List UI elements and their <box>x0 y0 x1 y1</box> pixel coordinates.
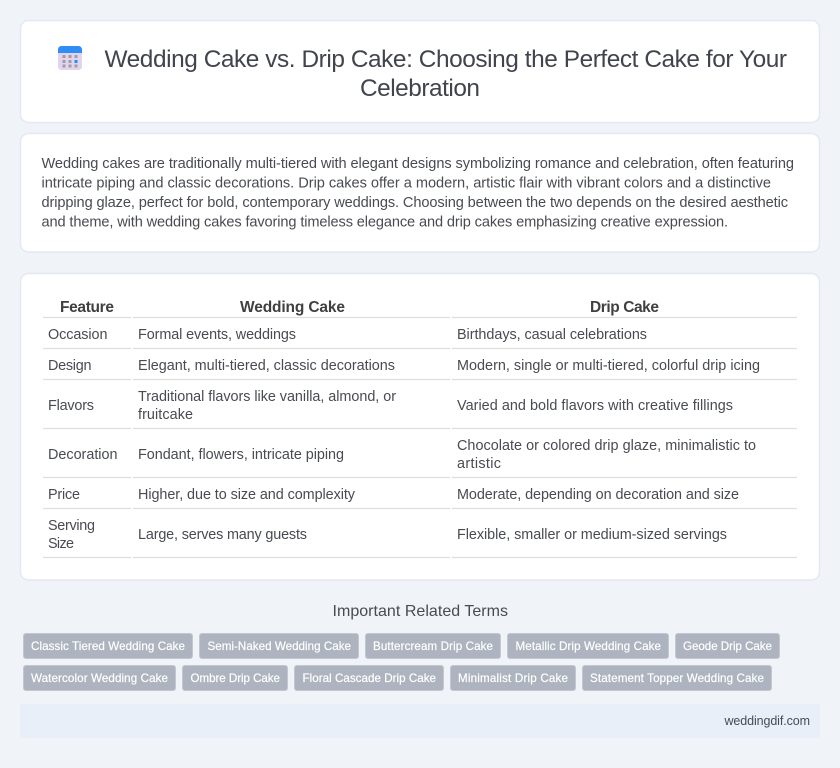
text block: introduction paragraph: and theme, with wedding cakes favoring timeless elegance and drip cakes emphasizing creative expression. <box>42 214 728 230</box>
table row: occasion: Formal events, weddings <box>138 327 296 343</box>
tag <box>24 634 192 658</box>
tag <box>200 634 358 658</box>
table row: design: Modern, single or multi-tiered, colorful drip icing <box>457 358 760 374</box>
text block: introduction paragraph: dripping glaze, perfect for bold, contemporary weddings. Choosing between the two depends on the desired aesthetic <box>42 195 788 211</box>
panel: introduction <box>20 134 820 252</box>
tag: Ombre Drip Cake <box>190 672 280 685</box>
title <box>104 46 787 102</box>
table row: decoration: artistic <box>457 456 501 472</box>
table row: price: Higher, due to size and complexity <box>138 487 356 503</box>
table row: flavors: Flavors <box>48 398 94 414</box>
tag: Classic Tiered Wedding Cake <box>31 640 185 653</box>
table row: occasion <box>48 327 647 343</box>
table row: serving size: Flexible, smaller or medium-sized servings <box>457 527 727 543</box>
table row: flavors: Traditional flavors like vanilla, almond, or <box>138 389 396 405</box>
footer bar: weddingdif.com <box>724 714 810 728</box>
table row: design: Elegant, multi-tiered, classic decorations <box>138 358 395 374</box>
footer bar <box>20 704 820 738</box>
text block: introduction paragraph: intricate piping and classic decorations. Drip cakes offer a modern, artistic flair with vibrant colors and a distinctive <box>42 176 771 192</box>
table row: flavors: fruitcake <box>138 407 193 423</box>
tag: Semi-Naked Wedding Cake <box>208 640 351 653</box>
tag: Geode Drip Cake <box>683 640 772 653</box>
table row: serving size <box>48 518 727 552</box>
text block: introduction paragraph: Wedding cakes are traditionally multi-tiered with elegant designs symbolizing romance and celebration, often featuring <box>42 156 794 172</box>
tag <box>24 666 176 690</box>
table row: price: Price <box>48 487 80 503</box>
table header row: Drip Cake <box>590 299 659 316</box>
tag <box>508 634 668 658</box>
tag <box>582 666 772 690</box>
tag <box>182 666 288 690</box>
table row: flavors: Varied and bold flavors with creative fillings <box>457 398 733 414</box>
tag <box>676 634 780 658</box>
table row: occasion: Occasion <box>48 327 108 343</box>
panel: comparison table <box>20 274 820 580</box>
table header row: Feature <box>60 299 114 316</box>
table row: serving size: Serving <box>48 518 95 534</box>
table row: decoration: Chocolate or colored drip glaze, minimalistic to <box>457 438 756 454</box>
tag list: related terms <box>24 634 780 690</box>
tag: Floral Cascade Drip Cake <box>302 672 436 685</box>
table row: decoration: Fondant, flowers, intricate piping <box>138 447 344 463</box>
text block: introduction paragraph <box>42 156 794 230</box>
tag <box>294 666 444 690</box>
icon: calendar <box>58 46 82 70</box>
table header row <box>60 299 659 316</box>
title: Celebration <box>360 75 480 102</box>
tag <box>450 666 576 690</box>
table header row: Wedding Cake <box>240 299 345 316</box>
tag: Buttercream Drip Cake <box>373 640 493 653</box>
table row: decoration <box>48 438 756 472</box>
table row: decoration: Decoration <box>48 447 118 463</box>
tag: Metallic Drip Wedding Cake <box>516 640 661 653</box>
tag: Statement Topper Wedding Cake <box>590 672 764 685</box>
table row: design: Design <box>48 358 92 374</box>
table row: price: Moderate, depending on decoration and size <box>457 487 739 503</box>
table row: design <box>48 358 760 374</box>
tag: Watercolor Wedding Cake <box>31 672 168 685</box>
title: Wedding Cake vs. Drip Cake: Choosing the Perfect Cake for Your <box>104 46 787 73</box>
table row: serving size: Size <box>48 536 74 552</box>
table row: occasion: Birthdays, casual celebrations <box>457 327 647 343</box>
tag <box>366 634 500 658</box>
panel: title card <box>20 20 820 122</box>
table row: serving size: Large, serves many guests <box>138 527 307 543</box>
heading: important related terms: Important Related Terms <box>332 603 508 620</box>
tag: Minimalist Drip Cake <box>458 672 568 685</box>
table row: flavors <box>48 389 733 423</box>
table row: price <box>48 487 739 503</box>
